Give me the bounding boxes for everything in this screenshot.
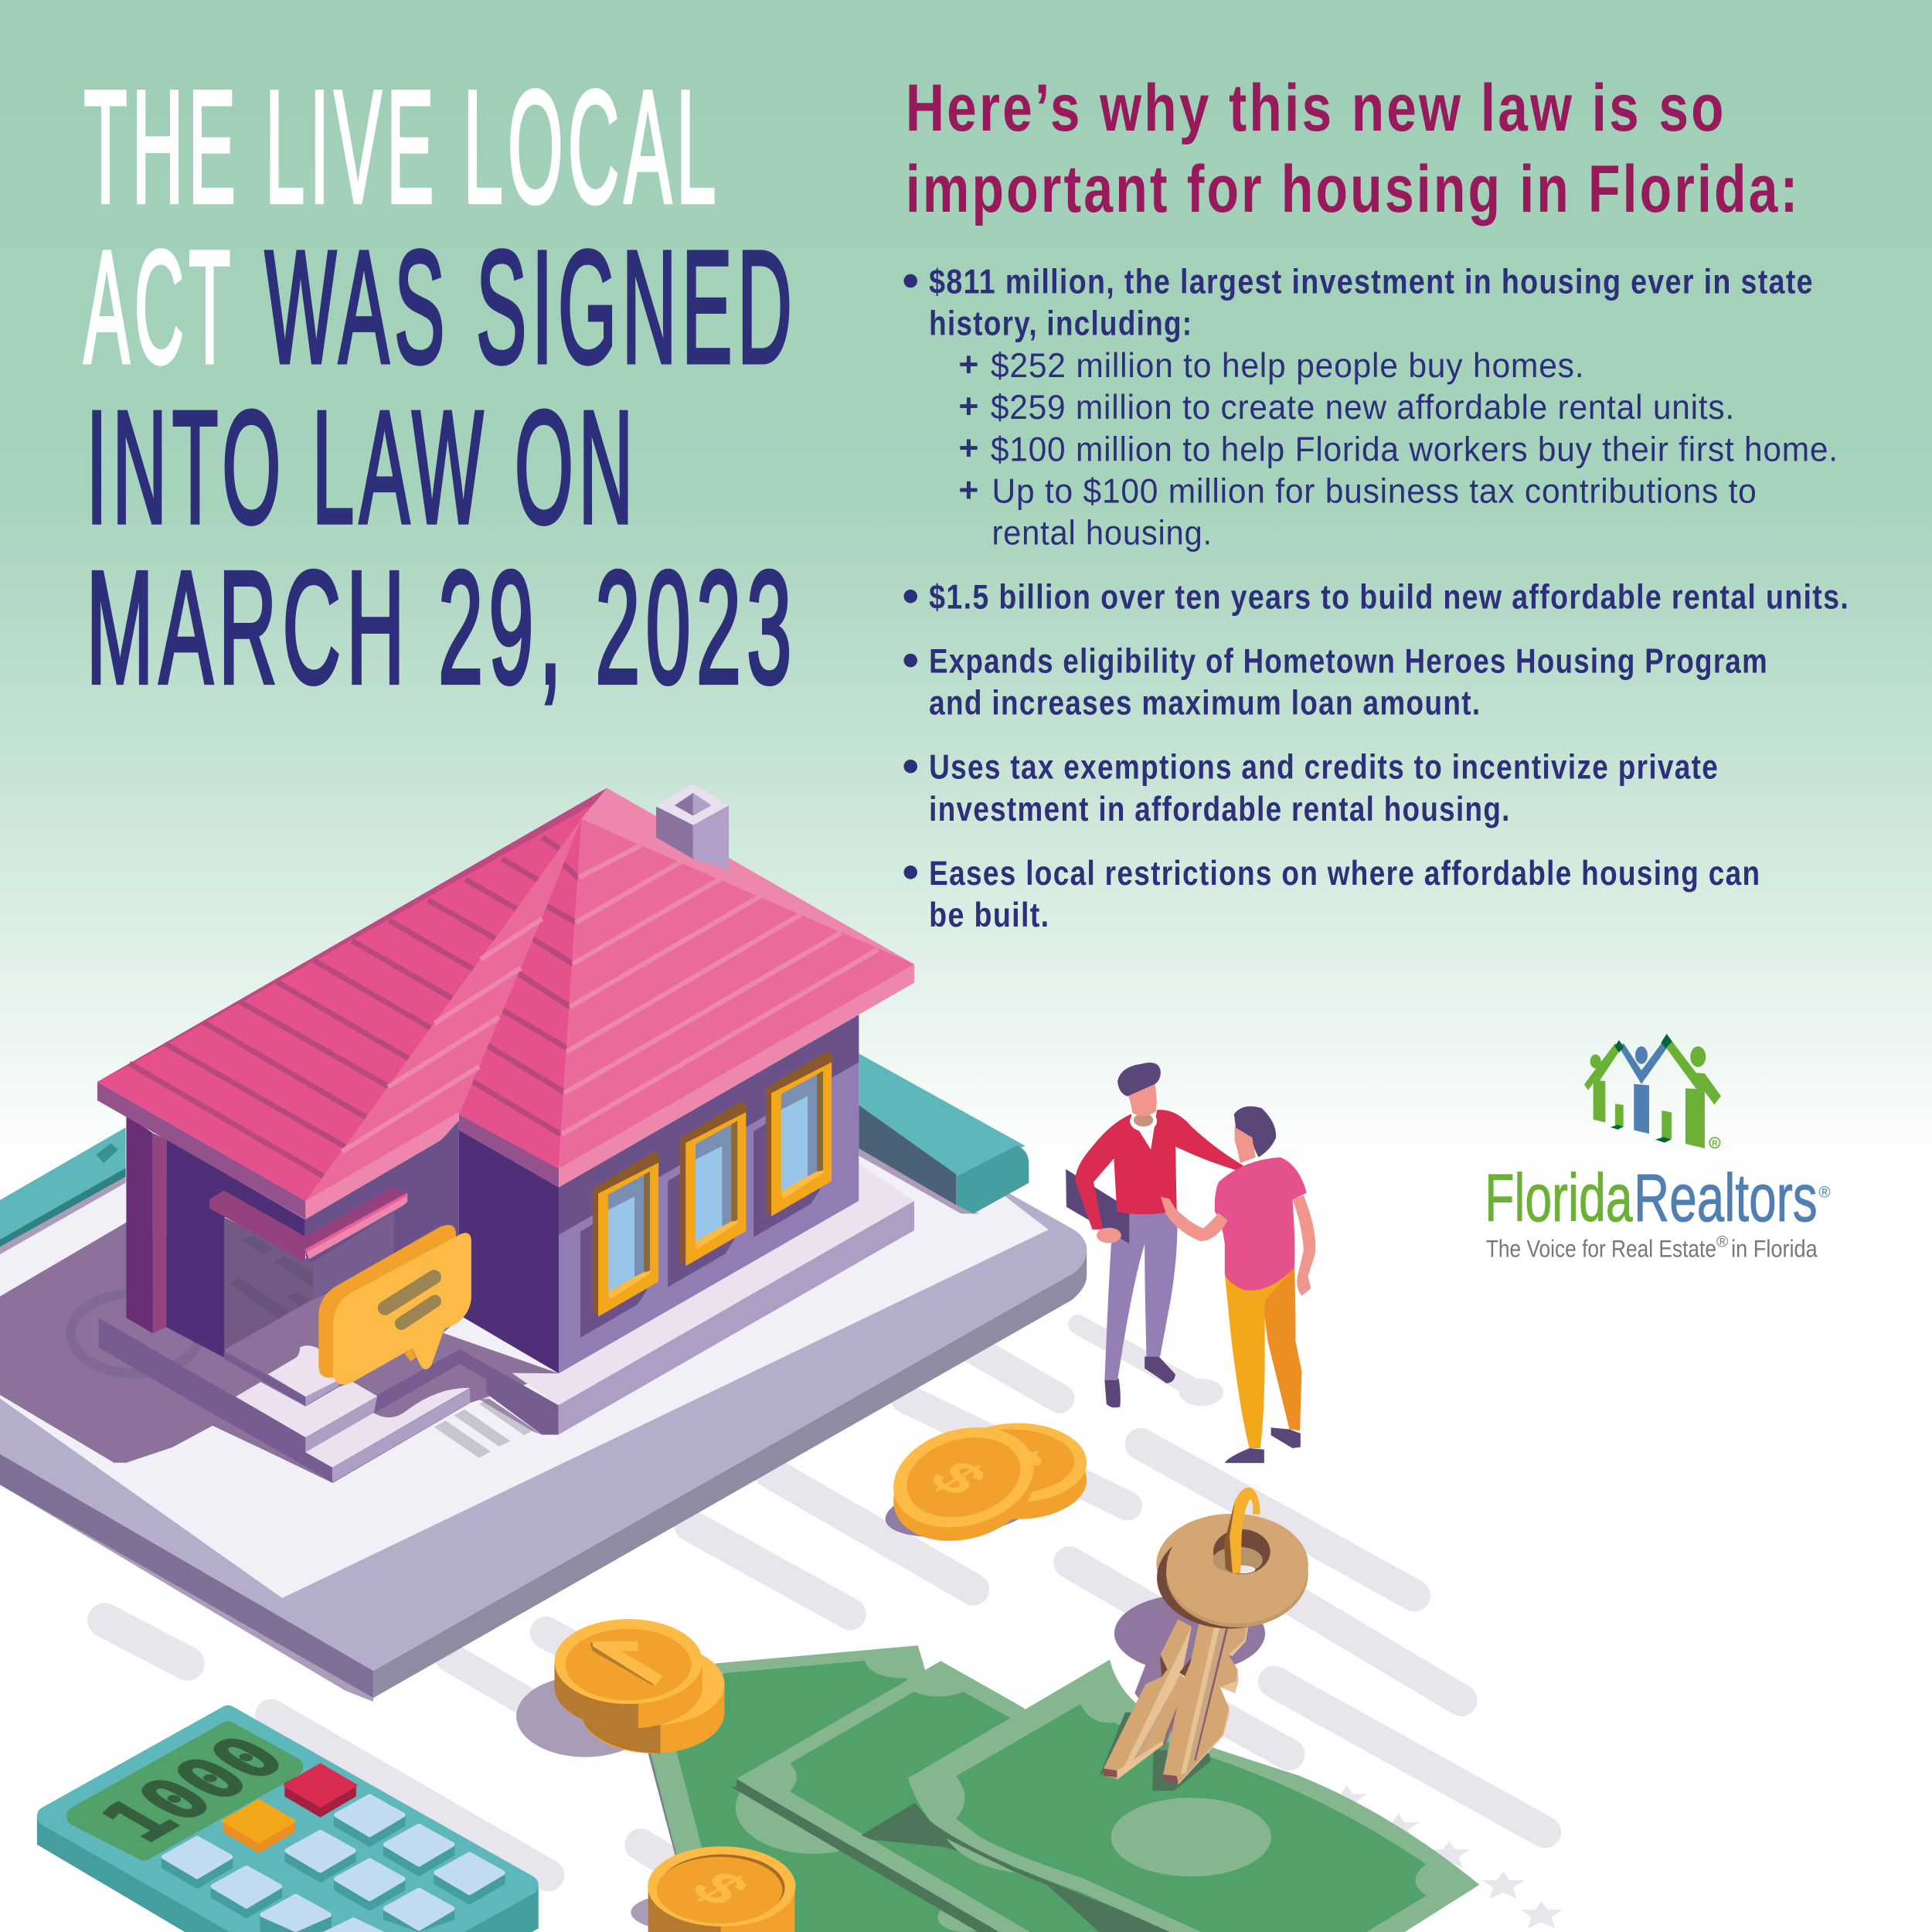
platform	[0, 1109, 1087, 1702]
logo: Florida Realtors: ®	[1716, 1233, 1728, 1251]
coins: middle pair	[882, 1413, 1087, 1556]
calculator: 1000	[81, 1724, 306, 1854]
heading: why this law matters: Here’s why this new law is so	[906, 71, 1726, 145]
text block: bullet list: history, including:	[929, 305, 1192, 343]
text block: bullet list: +	[958, 387, 980, 425]
text block: bullet list: $252 million to help people buy homes.	[991, 347, 1584, 385]
coins: middle pair: $	[972, 1438, 1061, 1489]
calculator display	[77, 1731, 293, 1851]
text block: bullet list	[903, 263, 1849, 934]
text block: bullet list: Eases local restrictions on where affordable housing can	[929, 855, 1760, 893]
logo: Florida Realtors: in Florida	[1731, 1234, 1818, 1262]
key shadow	[1114, 1594, 1265, 1672]
front key	[1163, 1614, 1248, 1784]
logo: Florida Realtors: ®	[1818, 1184, 1831, 1202]
house walls	[126, 1015, 859, 1373]
heading: why this law matters	[906, 71, 1800, 226]
paper sheet	[0, 1109, 1049, 1598]
teal book behind platform	[0, 1053, 1029, 1254]
text block: bullet list: Uses tax exemptions and credits to incentivize private	[929, 749, 1719, 787]
decorative stars	[1326, 1785, 1563, 1928]
fold shadow	[861, 1803, 1174, 1932]
text block: bullet list: and increases maximum loan amount.	[929, 685, 1481, 723]
text block: bullet list: +	[958, 345, 980, 383]
text block: bullet list: be built.	[929, 896, 1049, 934]
text: WAS SIGNED	[265, 217, 798, 396]
agent	[1066, 1063, 1243, 1407]
money: dollar bills	[648, 1645, 1479, 1932]
text block: bullet list: $259 million to create new affordable rental units.	[991, 389, 1735, 427]
front bill	[908, 1660, 1479, 1932]
coins: middle pair: $	[914, 1452, 1003, 1504]
back key	[1162, 1695, 1182, 1752]
text block: bullet list: rental housing.	[992, 515, 1213, 553]
coin stack	[516, 1619, 725, 1757]
house	[0, 784, 914, 1483]
logo: Florida Realtors: Florida	[1485, 1160, 1633, 1236]
client	[1161, 1106, 1315, 1463]
calculator	[37, 1715, 539, 1932]
porch interior	[209, 1186, 460, 1406]
logo: Florida Realtors: The Voice for Real Estate	[1486, 1234, 1716, 1262]
text block: bullet list: +	[958, 430, 980, 468]
text block: bullet list: $100 million to help Florida workers buy their first home.	[991, 430, 1838, 468]
house ground shadow	[0, 1223, 559, 1483]
chimney	[656, 807, 693, 859]
middle bill	[736, 1661, 1232, 1932]
text: THE LIVE LOCAL	[83, 56, 721, 236]
back bill	[648, 1753, 680, 1861]
text block: bullet list: Expands eligibility of Hometown Heroes Housing Program	[929, 643, 1768, 681]
text block: bullet list: Up to $100 million for business tax contributions to	[992, 473, 1757, 511]
logo: Florida Realtors	[1485, 1034, 1831, 1262]
key ring	[1156, 1514, 1308, 1615]
coin bottom: $	[676, 1862, 765, 1913]
title	[83, 56, 798, 716]
text block: bullet list: investment in affordable rental housing.	[929, 791, 1511, 828]
text block: bullet list: +	[958, 471, 980, 509]
logo: Florida Realtors: R	[1712, 1139, 1718, 1148]
roof	[97, 784, 914, 1219]
porch steps and walkway	[99, 1164, 914, 1482]
title: MARCH 29, 2023	[87, 537, 798, 716]
title: INTO LAW ON	[87, 377, 638, 556]
background road stripes	[105, 1325, 1545, 1883]
keys	[1100, 1488, 1308, 1791]
people: agent and client	[1066, 1063, 1315, 1463]
speech bubble	[318, 1225, 471, 1385]
logo: Florida Realtors: Realtors	[1634, 1160, 1818, 1236]
coin bottom	[631, 1846, 795, 1932]
title: ACT	[83, 217, 236, 396]
calculator keys	[162, 1764, 505, 1932]
